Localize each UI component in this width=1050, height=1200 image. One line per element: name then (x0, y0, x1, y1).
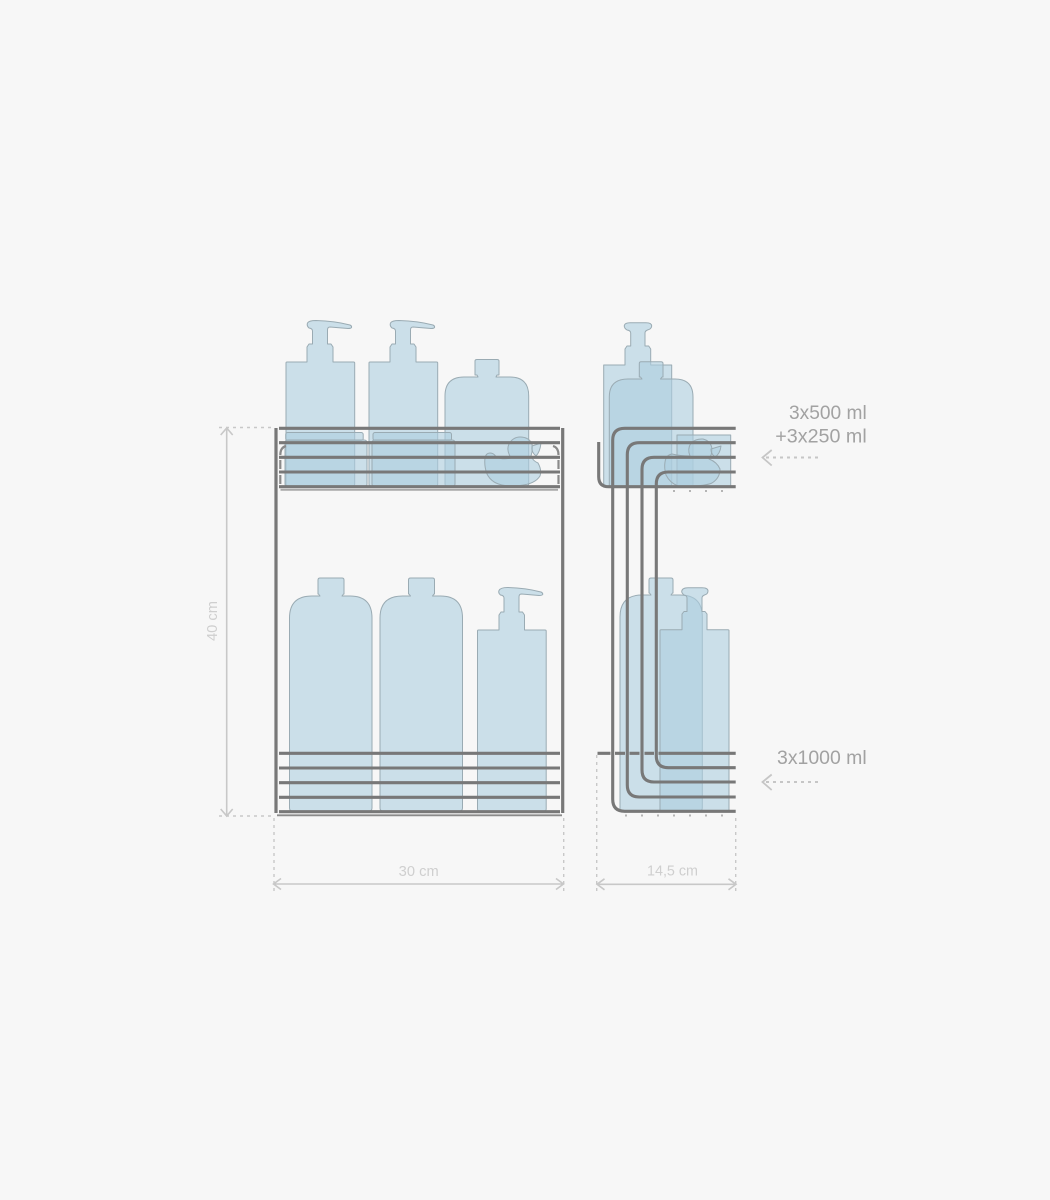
jar: left lid and body (285, 432, 367, 486)
label: lower shelf capacity: 3x1000 ml (777, 747, 867, 769)
upper shelf rails (279, 428, 560, 487)
front view: lower shelf bottles (290, 578, 546, 811)
dimension: width 30 cm (274, 818, 564, 894)
bottle: round 1000 ml, second (380, 578, 462, 811)
upper shelf left side bracket (280, 446, 286, 484)
lower shelf dashed rail (598, 752, 736, 755)
jar: side (677, 435, 731, 486)
bottle: round 1000 ml, first (290, 578, 372, 811)
side view: upper shelf contents (604, 323, 731, 486)
bottle: round side (609, 362, 693, 486)
lower shelf end dots (626, 814, 722, 816)
lower shelf rails (279, 753, 560, 812)
icon: rubber duck front (485, 437, 541, 486)
label: upper shelf capacity: 3x500 ml (789, 402, 867, 424)
upper shelf right side bracket (553, 446, 558, 484)
wire loop: inner (656, 472, 736, 768)
bottle: round 500 ml (445, 360, 529, 486)
wire loop: second (627, 443, 736, 797)
label: upper shelf capacity: +3x250 ml (775, 425, 867, 447)
dimension: depth 14,5 cm: 14,5 cm (647, 864, 698, 880)
jar: middle lid and body (372, 432, 455, 486)
upper shelf end dots (674, 490, 722, 492)
dimension: depth 14,5 cm (597, 755, 736, 894)
dimension: height 40 cm: 40 cm (205, 601, 221, 641)
frame posts (276, 428, 563, 813)
dimension: height 40 cm (205, 428, 275, 816)
bottle: pump 500 ml, first (286, 320, 355, 486)
label: upper shelf capacity (775, 402, 867, 447)
bottle: pump 500 ml, second (369, 320, 438, 486)
wire loop: outer (613, 428, 736, 811)
icon: rubber duck side (665, 439, 721, 486)
dimension: width 30 cm: 30 cm (399, 864, 439, 880)
bottle: pump 1000 ml (478, 588, 546, 811)
upper shelf hook (599, 442, 736, 487)
arrow: upper shelf (762, 450, 820, 466)
front view: wire frame (276, 428, 563, 815)
bottle: pump side (604, 323, 672, 486)
front view: upper shelf contents (285, 320, 541, 486)
side view: lower shelf bottles (620, 578, 729, 811)
bottle: pump 1000 ml side (660, 588, 729, 811)
bottle: round 1000 ml side (620, 578, 702, 811)
arrow: lower shelf (762, 774, 820, 790)
side view: wire frame (598, 428, 736, 816)
lower shelf base line (277, 814, 562, 816)
upper shelf base line (280, 489, 558, 491)
wire loop: third (642, 457, 736, 782)
